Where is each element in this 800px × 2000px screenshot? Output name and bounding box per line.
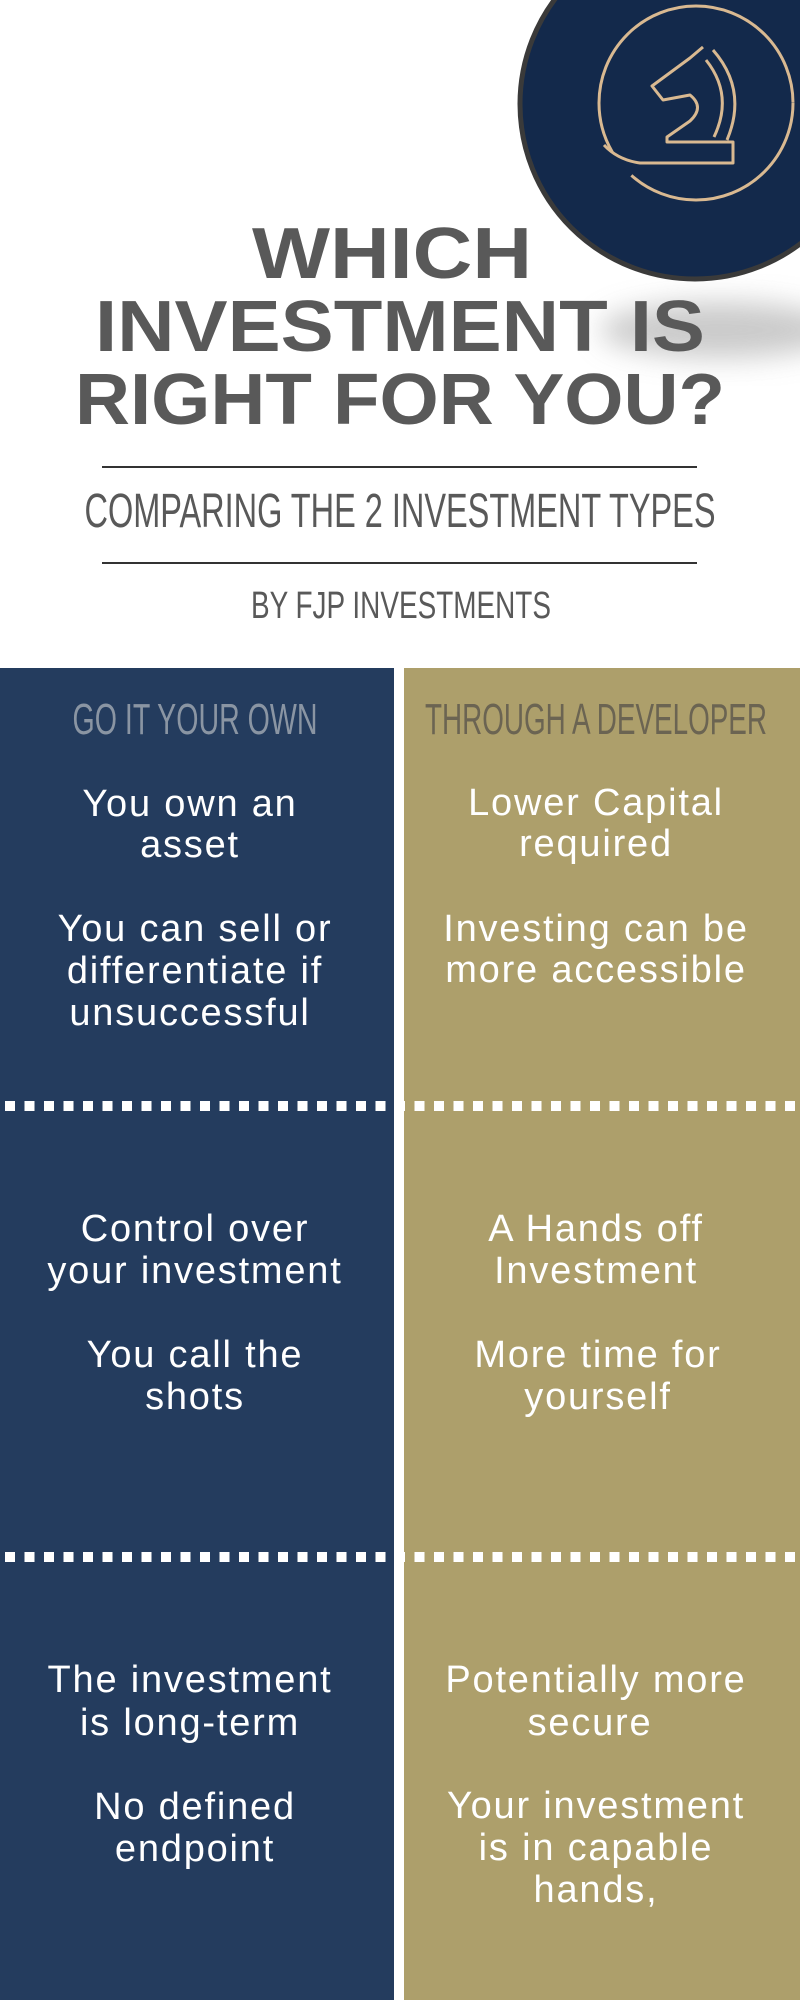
panel: through a developer: Your investment xyxy=(447,1785,745,1827)
panel: through a developer: yourself xyxy=(524,1376,672,1418)
logo badge xyxy=(520,0,800,279)
byline: BY FJP INVESTMENTS xyxy=(251,585,551,627)
panel: go it your own: differentiate if xyxy=(67,950,323,992)
title: RIGHT FOR YOU? xyxy=(75,360,725,440)
panel: through a developer: Potentially more xyxy=(445,1659,747,1701)
panel: go it your own: Control over xyxy=(81,1208,309,1250)
panel: go it your own: You can sell or xyxy=(58,908,332,950)
panel: go it your own: endpoint xyxy=(115,1828,275,1870)
panel: through a developer: required xyxy=(519,823,673,865)
panel: go it your own: shots xyxy=(145,1376,245,1418)
panel: go it your own: You own an xyxy=(82,783,298,825)
shadow under logo xyxy=(600,302,800,358)
panel: go it your own: GO IT YOUR OWN xyxy=(72,695,318,744)
panel: go it your own xyxy=(0,668,394,2000)
panel: through a developer: Lower Capital xyxy=(468,782,724,824)
panel: through a developer: A Hands off xyxy=(488,1208,704,1250)
panel: through a developer: Investment xyxy=(494,1250,698,1292)
panel: go it your own: your investment xyxy=(47,1250,343,1292)
panel: go it your own: asset xyxy=(140,824,240,866)
title: INVESTMENT IS xyxy=(95,287,705,367)
panel: through a developer: More time for xyxy=(474,1334,722,1376)
panel: through a developer: more accessible xyxy=(445,949,747,991)
title xyxy=(75,214,725,440)
title: WHICH xyxy=(252,214,532,294)
panel: go it your own: No defined xyxy=(94,1786,296,1828)
panel: go it your own: is long-term xyxy=(80,1702,300,1744)
panel: through a developer: is in capable xyxy=(479,1827,713,1869)
panel: through a developer: hands, xyxy=(534,1869,658,1911)
panel: go it your own: You call the xyxy=(87,1334,303,1376)
panel: go it your own: unsuccessful xyxy=(69,992,311,1034)
panel: through a developer: Investing can be xyxy=(443,908,749,950)
panel: through a developer xyxy=(404,668,800,2000)
panel: go it your own: The investment xyxy=(48,1659,332,1701)
panel: through a developer: secure xyxy=(528,1702,652,1744)
